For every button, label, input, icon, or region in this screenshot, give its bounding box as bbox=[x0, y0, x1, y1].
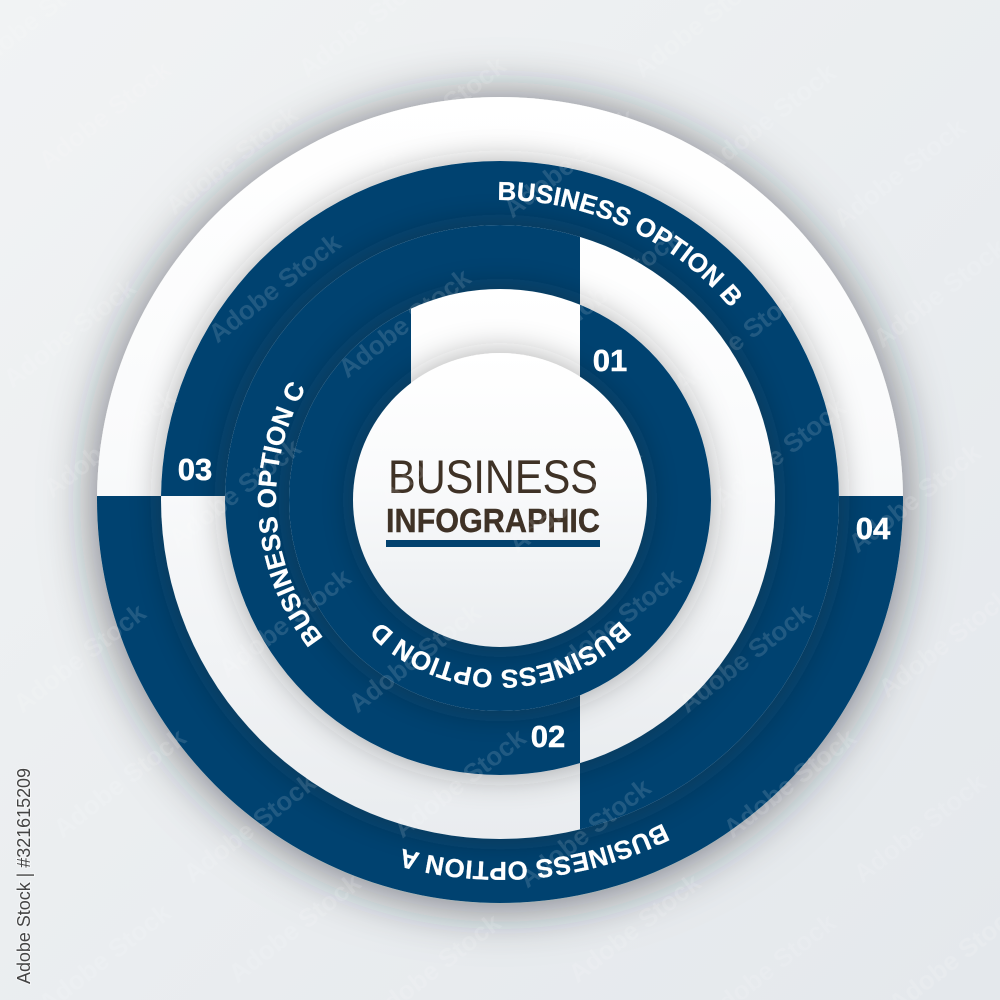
watermarks: Adobe Stock bbox=[668, 277, 812, 399]
watermarks: Adobe Stock bbox=[223, 867, 367, 989]
number 01: 01 bbox=[593, 343, 627, 378]
watermarks: Adobe Stock bbox=[373, 387, 517, 509]
number 03: 03 bbox=[178, 452, 212, 487]
watermarks: Adobe Stock bbox=[368, 50, 512, 172]
watermarks: Adobe Stock bbox=[0, 272, 142, 394]
title bbox=[386, 450, 600, 547]
title: INFOGRAPHIC bbox=[386, 502, 600, 539]
watermarks: Adobe Stock bbox=[178, 767, 322, 889]
ring 3: blue left section and white right section bbox=[225, 225, 775, 775]
label: business option C: BUSINESS OPTION C bbox=[258, 382, 322, 648]
ring 1: outer ring, white top and blue bottom bbox=[97, 97, 903, 903]
centre circle bbox=[353, 353, 647, 647]
watermarks: Adobe Stock bbox=[843, 437, 987, 559]
title: BUSINESS bbox=[388, 450, 598, 503]
watermarks: Adobe Stock bbox=[388, 722, 532, 844]
watermarks: Adobe Stock bbox=[498, 102, 642, 224]
watermarks: Adobe Stock bbox=[163, 432, 307, 554]
watermarks: Adobe Stock bbox=[718, 722, 862, 844]
stock id text: Adobe Stock | #321615209 bbox=[14, 768, 34, 984]
watermarks: Adobe Stock bbox=[343, 597, 487, 719]
watermarks: Adobe Stock bbox=[48, 722, 192, 844]
label: business option B: BUSINESS OPTION B bbox=[499, 182, 742, 306]
watermarks: Adobe Stock bbox=[333, 262, 477, 384]
ring 4: blue ring with white top section bbox=[289, 289, 711, 711]
watermarks: Adobe Stock bbox=[33, 54, 177, 176]
watermarks: Adobe Stock bbox=[828, 112, 972, 234]
watermarks: Adobe Stock bbox=[160, 99, 304, 221]
ring 2: blue ring with white lower-left section bbox=[161, 161, 839, 839]
watermarks: Adobe Stock bbox=[513, 772, 657, 894]
watermarks: Adobe Stock bbox=[708, 392, 852, 514]
watermarks: Adobe Stock bbox=[38, 382, 182, 504]
watermarks: Adobe Stock bbox=[8, 597, 152, 719]
number 02: 02 bbox=[531, 719, 565, 754]
watermarks: Adobe Stock bbox=[563, 867, 707, 989]
watermarks: Adobe Stock bbox=[673, 597, 817, 719]
watermarks: Adobe Stock bbox=[698, 57, 842, 179]
watermarks: Adobe Stock bbox=[213, 562, 357, 684]
watermarks: Adobe Stock bbox=[543, 222, 687, 344]
watermarks: Adobe Stock bbox=[543, 562, 687, 684]
watermarks: Adobe Stock bbox=[848, 767, 992, 889]
label: business option A: BUSINESS OPTION A bbox=[402, 824, 670, 880]
watermarks: Adobe Stock bbox=[203, 227, 347, 349]
label: business option D: BUSINESS OPTION D bbox=[372, 621, 632, 688]
watermarks: Adobe Stock bbox=[503, 437, 647, 559]
number 04: 04 bbox=[856, 511, 891, 546]
